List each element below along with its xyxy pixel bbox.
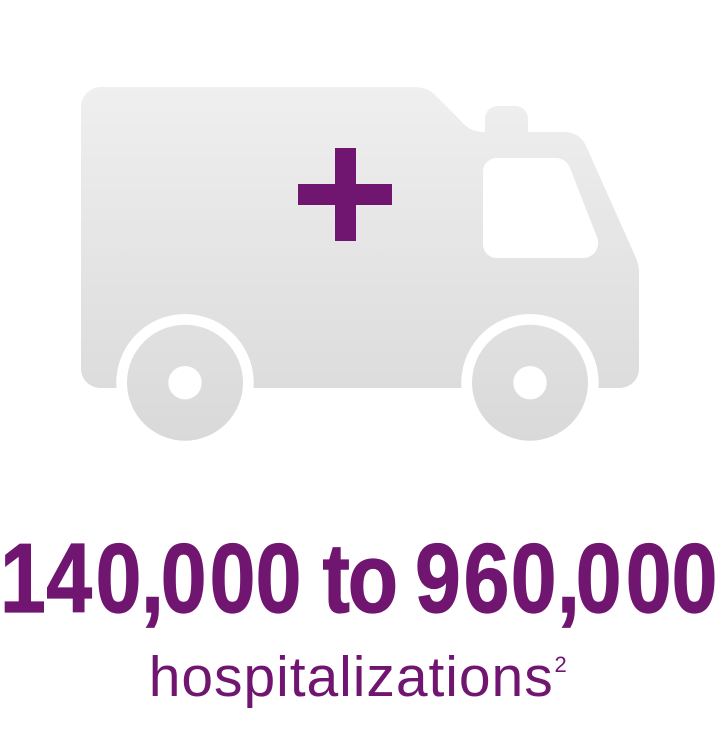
icon: ambulance: [81, 87, 639, 441]
headline figure: 140,000 to 960,000: [0, 524, 717, 634]
subheading: hospitalizations: [149, 645, 553, 709]
ambulance body with window cutout and wheel arches: [81, 87, 639, 388]
icon: medical cross: [298, 148, 392, 241]
left wheel: [127, 325, 243, 441]
footnote marker: 2: [554, 652, 567, 677]
right wheel: [472, 325, 588, 441]
